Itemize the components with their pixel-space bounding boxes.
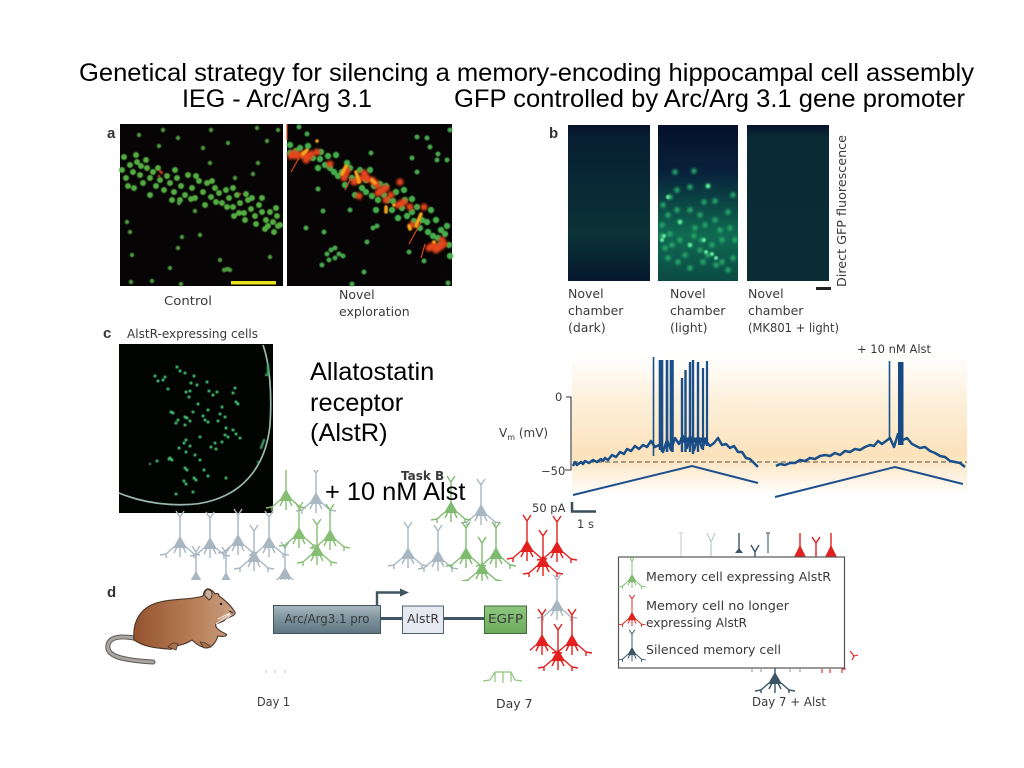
label: MK801: (MK801 + light)	[748, 320, 839, 335]
micrograph: control	[120, 124, 283, 286]
label: control: Control	[164, 293, 212, 308]
box: EGFP	[484, 606, 526, 634]
box: promoter: Arc/Arg3.1 pro	[284, 611, 370, 626]
neuron group: day 7 + Alst, bottom row	[752, 647, 858, 694]
annotation: + 10 nM Alst: + 10 nM Alst	[325, 478, 465, 506]
annotation: allatostatin receptor: Allatostatin	[310, 358, 434, 386]
y axis: (mV)	[515, 426, 548, 440]
micrograph	[119, 344, 273, 513]
label: light: Novel	[670, 286, 706, 301]
scale bar: 1 s	[577, 517, 594, 531]
vertical axis label: Direct GFP fluorescence	[834, 135, 849, 287]
annotation: allatostatin receptor: (AlstR)	[310, 419, 388, 447]
label: dark: Novel	[568, 286, 604, 301]
scale bar	[532, 501, 596, 531]
linker line	[381, 617, 484, 620]
scale bar	[231, 281, 276, 284]
legend item: silenced memory cell	[618, 630, 781, 662]
micrograph: novel exploration	[287, 124, 452, 286]
label: + 10 nM Alst: + 10 nM Alst	[857, 342, 931, 356]
promoter arrow	[377, 588, 409, 605]
y axis: m	[507, 433, 515, 442]
legend item: memory cell no longer expressing AlstR: expressing AlstR	[646, 615, 747, 630]
title: IEG - Arc/Arg 3.1	[182, 85, 372, 113]
trace with Alst	[776, 361, 965, 467]
y axis: 0	[555, 390, 562, 404]
title: GFP controlled by Arc/Arg 3.1 gene promoter	[454, 85, 966, 113]
electrophysiology chart	[499, 342, 967, 531]
micrograph: dark	[568, 125, 650, 281]
panel b: GFP fluorescence micrographs	[549, 125, 849, 335]
legend item: memory cell no longer expressing AlstR: Memory cell no longer	[646, 598, 790, 613]
label: novel exploration: Novel	[339, 287, 375, 302]
threshold dashed line	[573, 461, 967, 463]
legend	[618, 557, 844, 668]
label: dark: (dark)	[568, 320, 606, 335]
y axis: V	[499, 426, 507, 440]
gene construct	[274, 588, 526, 634]
micrograph: MK801	[747, 125, 829, 281]
green fragment below construct	[483, 672, 522, 683]
legend item: memory cell no longer expressing AlstR	[618, 595, 790, 630]
label: light: chamber	[670, 303, 726, 318]
box: EGFP: EGFP	[488, 611, 524, 626]
box: promoter	[274, 606, 380, 634]
heading: AlstR-expressing cells	[127, 326, 258, 341]
title	[79, 59, 974, 113]
legend item: silenced memory cell: Silenced memory cell	[646, 642, 781, 657]
title: Genetical strategy for silencing a memory-encoding hippocampal cell assembly	[79, 59, 974, 87]
label: Day 7 + Alst: Day 7 + Alst	[752, 694, 826, 709]
label: novel exploration: exploration	[339, 304, 410, 319]
y axis	[499, 390, 571, 478]
box: AlstR: AlstR	[407, 611, 439, 626]
label: Day 1: Day 1	[257, 694, 290, 709]
current ramps	[573, 466, 963, 497]
label: MK801: Novel	[748, 286, 784, 301]
neuron group: day 1	[160, 470, 350, 580]
panel a: control and novel exploration micrographs: a	[107, 125, 116, 142]
green neurons	[266, 464, 350, 566]
label: MK801: chamber	[748, 303, 804, 318]
neuron group: day 7	[388, 469, 592, 711]
panel c: AlstR-expressing cells	[103, 325, 273, 513]
label: Day 7: Day 7	[496, 696, 533, 711]
panel b: GFP fluorescence micrographs: b	[549, 125, 558, 142]
gray neurons	[160, 470, 336, 580]
scale bar	[816, 287, 831, 290]
panel a: control and novel exploration micrographs	[107, 124, 452, 319]
neuron group: day 7 + Alst, top row	[679, 533, 837, 557]
trace without Alst	[573, 357, 758, 467]
chart background	[572, 355, 967, 495]
annotation: allatostatin receptor: receptor	[310, 389, 404, 417]
legend item: memory cell expressing AlstR: Memory cell expressing AlstR	[646, 569, 831, 584]
panel d label: d	[107, 584, 116, 601]
task B label: Task B	[401, 469, 444, 483]
micrograph: light	[658, 125, 738, 281]
scale bar: 50 pA	[532, 501, 566, 515]
panel c: AlstR-expressing cells: c	[103, 325, 111, 342]
label: light: (light)	[670, 320, 707, 335]
box: AlstR	[402, 606, 444, 634]
label: dark: chamber	[568, 303, 624, 318]
icon: rat	[108, 589, 235, 662]
legend item: memory cell expressing AlstR	[618, 557, 831, 589]
y axis: −50	[541, 464, 565, 478]
small fragments below day 1 neurons	[266, 670, 285, 673]
